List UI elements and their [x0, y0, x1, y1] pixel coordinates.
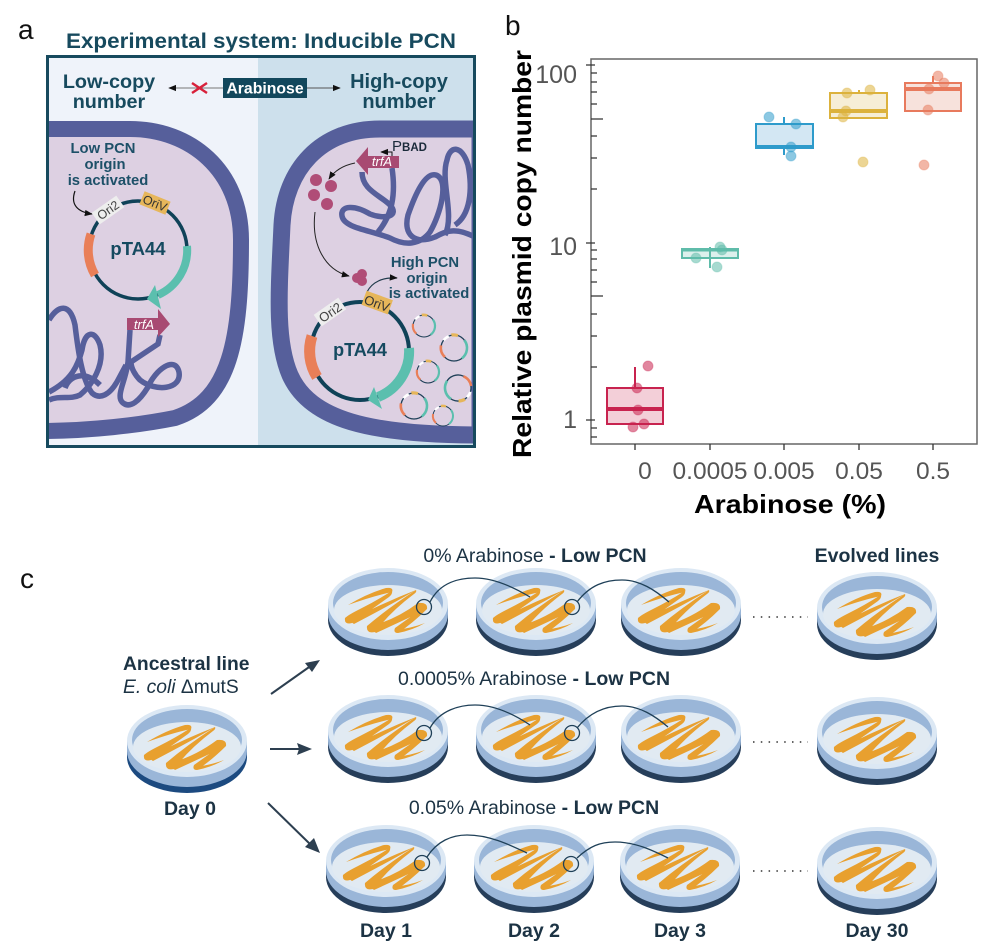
row 1 heading: 0% Arabinose - Low PCN: [423, 545, 647, 567]
plasmid: high copy pTA44: pTA44: [333, 340, 387, 360]
panel label a: a: [18, 14, 34, 45]
day labels: Day 1: [360, 920, 412, 942]
panel b: box plot: [507, 50, 977, 519]
x axis values: 0.5: [916, 458, 950, 485]
row 3 dots: [753, 870, 808, 872]
gene: trfA low copy: trfA: [134, 317, 154, 332]
promoter label PBAD: PBAD: [392, 138, 427, 155]
row 3 heading: 0.05% Arabinose - Low PCN: [409, 797, 659, 819]
chromosome: low copy: [49, 308, 179, 405]
plot frame: [591, 59, 977, 444]
arrow: to low copy (blocked): [169, 87, 223, 89]
row 2 dishes: [328, 695, 937, 785]
x axis title: Arabinose (%): [694, 489, 886, 519]
day labels: Day 3: [654, 920, 706, 942]
high copy heading: number: [362, 91, 436, 113]
high copy background: [258, 56, 475, 447]
row 1 dishes: [328, 568, 937, 660]
plasmid: low copy pTA44: OriV: [141, 192, 170, 215]
arabinose label: Arabinose: [226, 80, 304, 98]
day labels: Day 2: [508, 920, 560, 942]
text: high PCN origin activated: is activated: [389, 286, 469, 302]
low copy background: [47, 56, 258, 447]
text: high PCN origin activated: High PCN: [391, 255, 459, 271]
row 1 transfers: [416, 578, 669, 614]
text: high PCN origin activated: origin: [406, 271, 448, 287]
y axis values: [535, 61, 577, 434]
x axis values: 0.05: [835, 458, 883, 485]
gene: trfA low copy: [127, 309, 170, 337]
plasmid: high copy pTA44: OriV: [362, 292, 392, 315]
box: 0.0005: [682, 242, 738, 272]
frame: [48, 56, 474, 446]
x axis values: 0.005: [753, 458, 815, 485]
proteins: [308, 174, 337, 210]
box: 0: [607, 361, 663, 432]
row 1 dots: [753, 616, 808, 618]
ancestral line label: E. coli: [123, 677, 176, 698]
title: Experimental system: Inducible PCN: [66, 30, 456, 53]
box: 0.5: [905, 71, 961, 170]
x axis values: [638, 458, 950, 485]
low copy heading: Low-copy: [63, 71, 155, 93]
evolved lines heading: Evolved lines: [815, 545, 939, 567]
day labels: Day 30: [846, 920, 909, 942]
y axis values: 100: [535, 61, 577, 89]
text: low PCN origin activated: is activated: [68, 173, 148, 189]
arrow: down: [268, 803, 320, 853]
row 2 dots: [753, 741, 808, 743]
plasmid: high copy pTA44: [310, 291, 409, 409]
day labels: [360, 920, 909, 942]
x axis values: 0.0005: [673, 458, 747, 485]
cell: low copy: [40, 129, 241, 431]
plasmid: low copy pTA44: [88, 191, 187, 309]
x axis values: 0: [638, 458, 652, 485]
text: low PCN origin activated: origin: [84, 157, 126, 173]
y axis values: 1: [563, 406, 577, 434]
gene: trfA high copy: trfA: [372, 154, 392, 169]
row 2 transfers: [416, 705, 668, 740]
arrow: OriV activated: [367, 278, 397, 292]
row 3 transfers: [414, 835, 668, 872]
cell: high copy: [279, 129, 480, 435]
plasmid: low copy pTA44: Ori2: [95, 198, 122, 223]
ancestral line label: Ancestral line: [123, 654, 250, 675]
box: 0.005: [756, 112, 813, 161]
gene: trfA high copy: [356, 147, 399, 175]
small plasmid copies: [401, 315, 475, 426]
protein at origin: [352, 269, 367, 286]
arrow: protein to origin: [314, 212, 349, 276]
chromosome: high copy: [342, 149, 480, 243]
arrow: up: [271, 660, 320, 694]
row 2 heading: 0.0005% Arabinose - Low PCN: [398, 668, 670, 690]
panel c: evolution experiment: [123, 545, 939, 942]
ancestral dish: [127, 705, 247, 793]
arrow: to high copy: [307, 87, 340, 89]
y axis values: 10: [549, 233, 577, 261]
text: low PCN origin activated: Low PCN: [71, 141, 135, 157]
row 3 dishes: [326, 825, 937, 915]
box: 0.05: [830, 85, 887, 167]
low copy heading: number: [73, 91, 146, 113]
ancestral line label: ΔmutS: [176, 677, 239, 698]
panel a: experimental system: [40, 30, 480, 447]
y axis ticks: [586, 65, 933, 450]
plasmid: low copy pTA44: pTA44: [110, 238, 166, 259]
y axis title: Relative plasmid copy number: [507, 50, 537, 458]
arrow: trfA to protein: [329, 163, 355, 179]
high copy heading: High-copy: [350, 71, 449, 93]
panel label b: b: [505, 10, 521, 41]
icon: red cross: [192, 83, 207, 93]
plasmid: high copy pTA44: Ori2: [316, 299, 345, 326]
arrow: middle: [270, 743, 312, 755]
panel label c: c: [20, 563, 34, 594]
arrow: to Ori2: [74, 191, 92, 214]
day 0 label: Day 0: [164, 798, 216, 820]
